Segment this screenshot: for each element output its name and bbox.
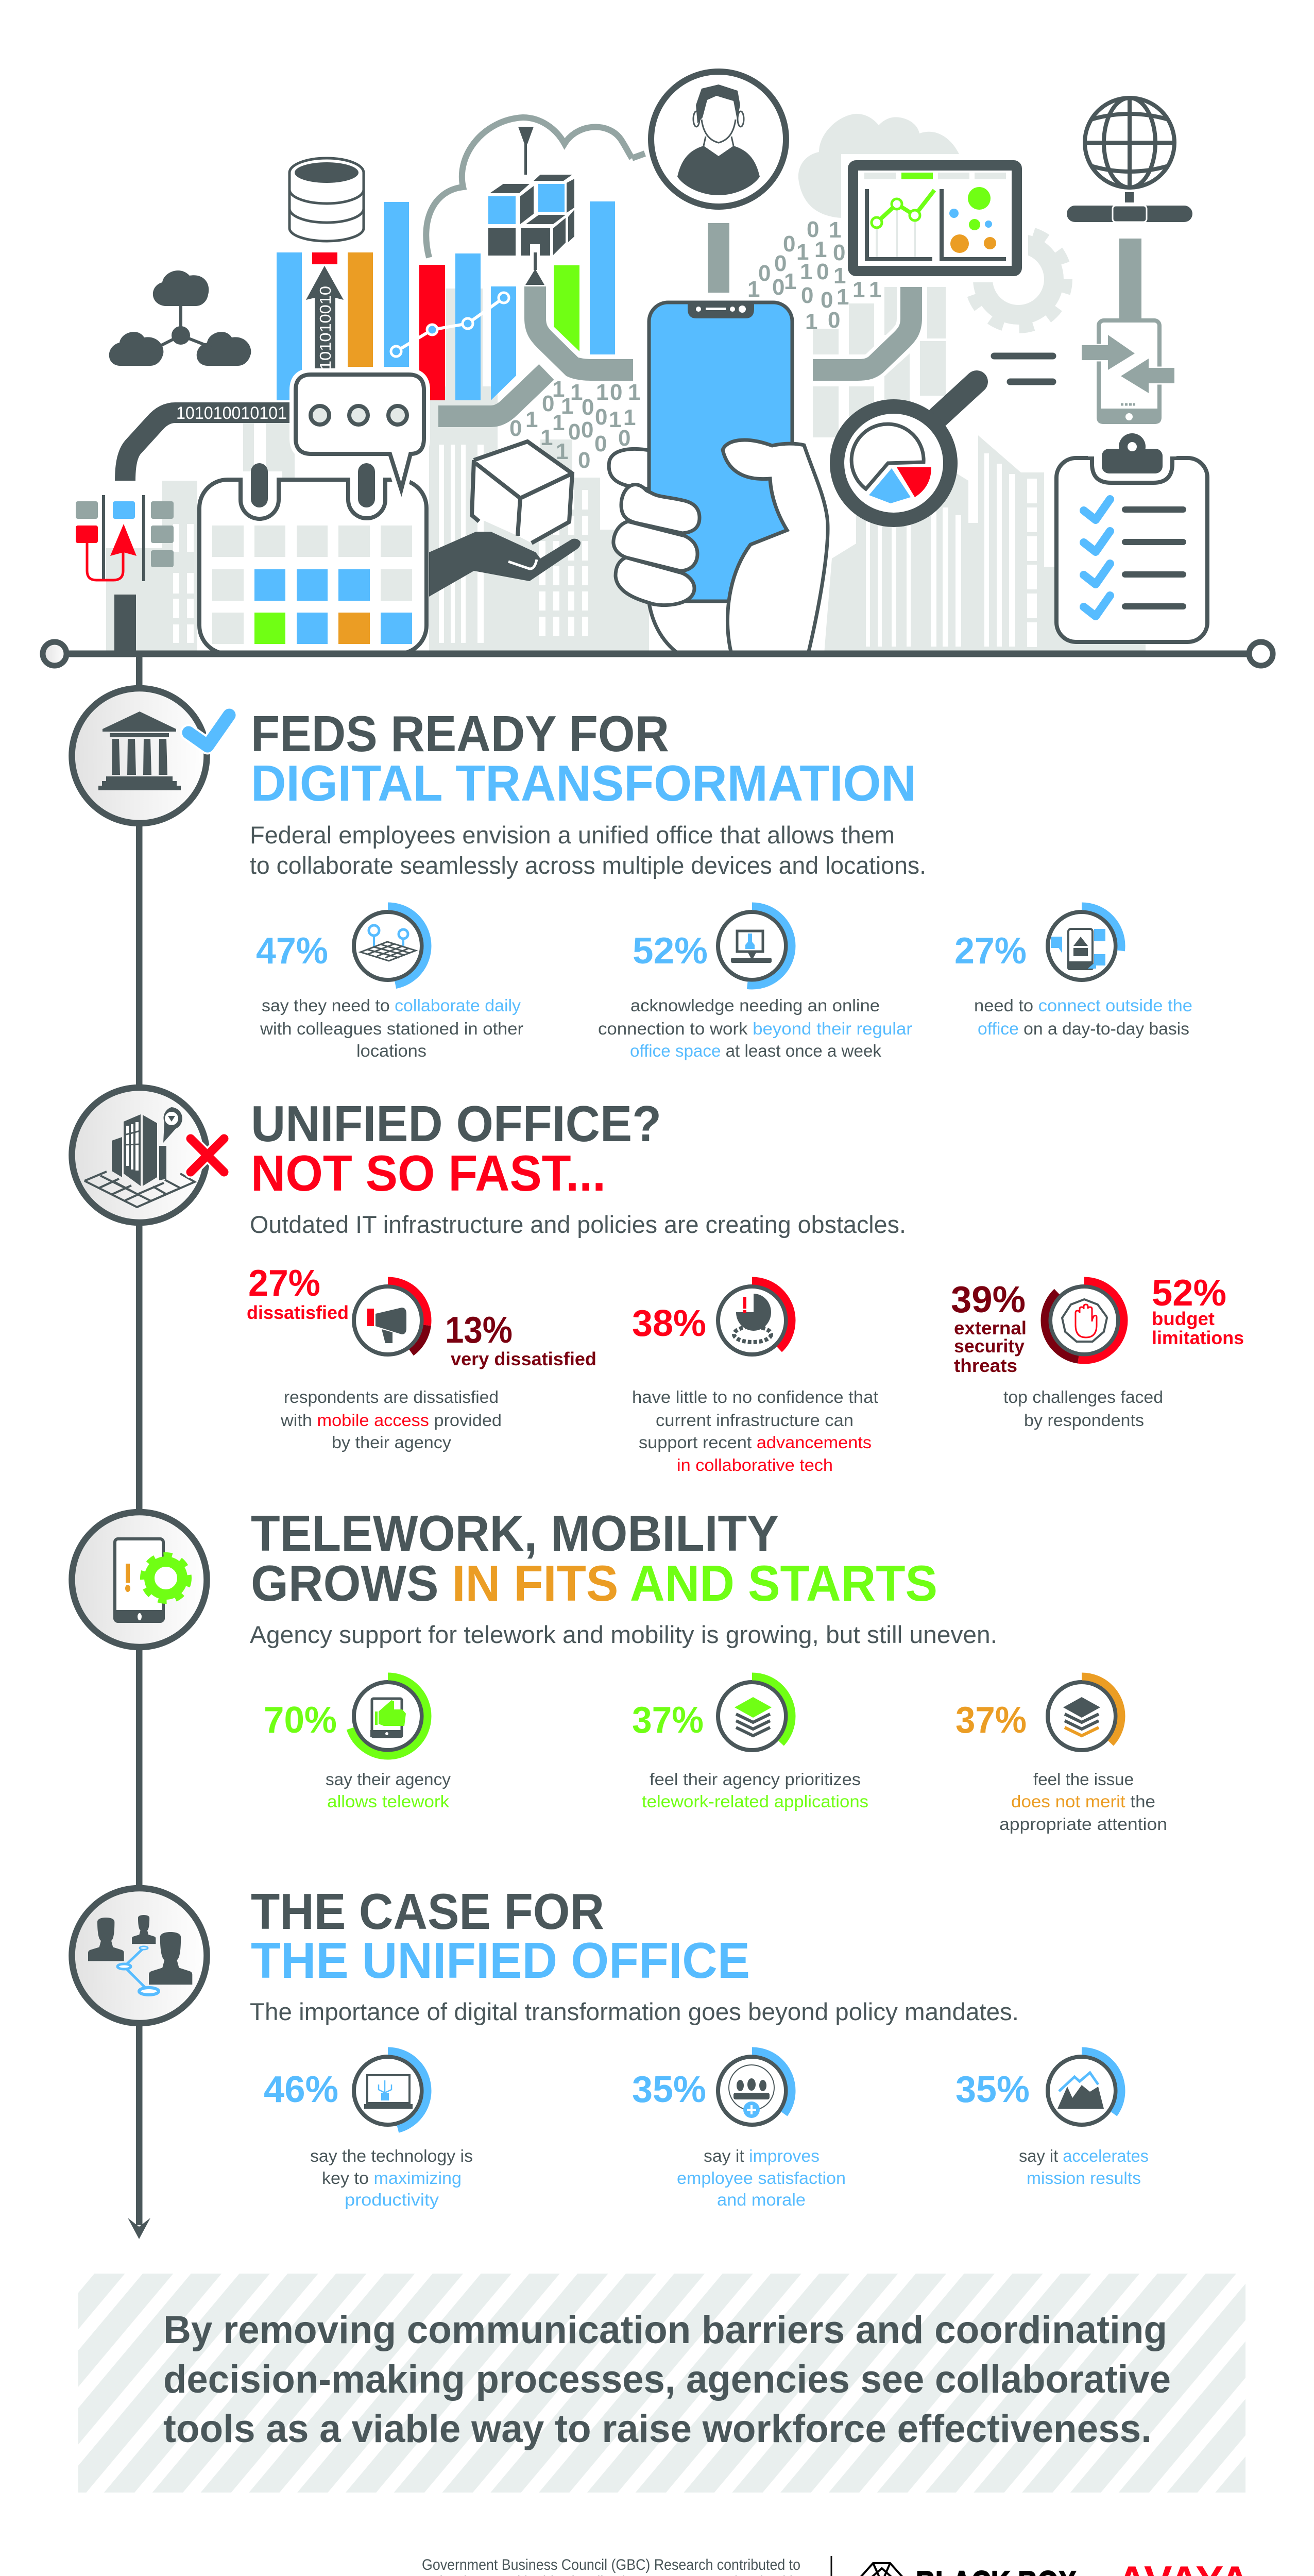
arrow up with binary: 101010010 [316, 286, 334, 370]
stat: 70%: 70% [264, 1700, 337, 1741]
heading [251, 1505, 937, 1612]
stat: 37% does not merit: does not merit the [1011, 1792, 1155, 1811]
icon: tablet with thumbs up [370, 1699, 406, 1737]
calendar [199, 463, 426, 654]
stat: 27% [954, 906, 1192, 1038]
stat: 52%: acknowledge needing an online [630, 996, 880, 1015]
stat: 70%: say their agency [326, 1770, 451, 1789]
heading [251, 1883, 750, 1989]
stat: 35% satisfaction: and morale [717, 2190, 806, 2209]
stat: 38%: 38% [632, 1303, 706, 1344]
icon: desktop computer with user [731, 931, 772, 963]
stat: top challenges: security [954, 1335, 1025, 1357]
stat: 35% mission: say it accelerates [1019, 2146, 1149, 2165]
stat: top challenges: limitations [1152, 1327, 1244, 1348]
icon: cloud network [109, 270, 251, 366]
icon: orange layers [1063, 1697, 1100, 1736]
line chart over bars [391, 293, 509, 357]
heading: UNIFIED OFFICE? [251, 1095, 661, 1152]
stat: 35% mission [955, 2051, 1149, 2188]
icon: office towers with grid [72, 1088, 224, 1223]
stat: top challenges: external [954, 1317, 1027, 1338]
timeline base line [43, 642, 1273, 666]
stat: mobile access dissatisfaction: 27% [248, 1263, 320, 1304]
stat: 37% does not merit: 37% [955, 1700, 1027, 1741]
icon: analytics tablet [845, 157, 1025, 279]
intro text: Outdated IT infrastructure and policies are creating obstacles. [250, 1211, 906, 1238]
stat: top challenges: by respondents [1024, 1411, 1144, 1430]
stat: 70%: allows telework [327, 1792, 450, 1811]
icon: pie with alert [734, 1294, 771, 1342]
panel: not so fast [72, 1088, 1244, 1475]
stat: 35% satisfaction: 35% [632, 2069, 706, 2110]
icon: smartphone [649, 302, 792, 601]
heading: NOT SO FAST... [251, 1145, 606, 1201]
stat: 37% prioritizes: feel their agency prioritizes [650, 1770, 861, 1789]
stat: 47%: locations [356, 1041, 426, 1060]
icon: megaphone [367, 1308, 406, 1343]
stat: top challenges: budget [1152, 1308, 1215, 1329]
stat: 38%: have little to no confidence that [632, 1387, 878, 1406]
stat: 47%: 47% [256, 930, 328, 972]
stat: 47%: with colleagues stationed in other [260, 1019, 523, 1038]
stat: 46%: key to maximizing [322, 2168, 462, 2188]
intro text: Agency support for telework and mobility is growing, but still uneven. [250, 1621, 997, 1648]
icon: antenna [518, 127, 534, 175]
stat: 38%: in collaborative tech [677, 1455, 833, 1475]
dashes [994, 356, 1053, 382]
icon: mobile data exchange [1082, 239, 1174, 424]
intro text: The importance of digital transformation goes beyond policy mandates. [250, 1998, 1019, 2025]
hero illustration [76, 72, 1207, 654]
icon: user avatar [651, 72, 786, 293]
icon: mountain with trend line [1057, 2073, 1104, 2109]
stat: 47% [256, 906, 523, 1060]
panel: the case for the unified office [72, 1883, 1149, 2209]
icon: connected people [72, 1888, 207, 2023]
stat: 27%: need to connect outside the [974, 996, 1192, 1015]
stat: mobile access dissatisfaction: respondents are dissatisfied [284, 1387, 499, 1406]
heading: THE CASE FOR [251, 1883, 604, 1940]
stat: mobile access dissatisfaction: dissatisfied [247, 1302, 349, 1323]
background city skyline [106, 114, 1146, 654]
stat: 37% prioritizes [632, 1676, 868, 1811]
stat: top challenges: 39% [951, 1279, 1026, 1320]
stat: 46%: productivity [345, 2190, 439, 2209]
stat: 27%: 27% [954, 930, 1027, 972]
arrow into cubes [525, 252, 544, 285]
icon: clipboard checklist [1056, 433, 1207, 642]
icon: modular cubes [488, 175, 574, 256]
timeline vertical arrow [128, 654, 150, 2239]
heading: THE UNIFIED OFFICE [251, 1932, 750, 1989]
stat: mobile access dissatisfaction [247, 1263, 596, 1452]
stat: 46% [264, 2051, 473, 2209]
stat: 46%: 46% [264, 2069, 338, 2110]
stat: 38% [632, 1281, 878, 1475]
flow diagram with red arrow [76, 495, 174, 654]
stat: 27%: office on a day-to-day basis [978, 1019, 1189, 1038]
stat: 52%: office space at least once a week [630, 1041, 881, 1060]
stat: top challenges: top challenges faced [1003, 1387, 1163, 1406]
icon: database [289, 158, 364, 241]
gray data pipes [438, 286, 911, 416]
heading [251, 705, 916, 811]
stat: 35% satisfaction: say it improves [704, 2146, 820, 2165]
stat: 35% mission: 35% [955, 2069, 1030, 2110]
arrow up with binary [306, 266, 344, 374]
icon: hand holding phone [613, 440, 828, 654]
footer divider [830, 2556, 832, 2576]
stat: 37% does not merit: appropriate attention [999, 1815, 1167, 1834]
stat: 70% [264, 1676, 451, 1811]
icon: stop hand [1062, 1299, 1107, 1342]
stat: 52%: 52% [633, 930, 708, 972]
logo: Black Box [856, 2563, 1077, 2576]
heading [251, 1095, 661, 1201]
cloud outline [426, 117, 645, 258]
stat: 46%: say the technology is [310, 2146, 473, 2165]
intro text [250, 821, 926, 879]
icon: green layers [735, 1697, 772, 1736]
stat: 38%: support recent advancements [639, 1433, 872, 1452]
stat: 35% satisfaction [632, 2051, 846, 2209]
stat: 35% satisfaction: employee satisfaction [677, 2168, 846, 2188]
stat: 38%: current infrastructure can [656, 1411, 854, 1430]
icon: magnifier with pie [830, 382, 977, 527]
stat: 37% does not merit: feel the issue [1033, 1770, 1134, 1789]
icon: laptop [364, 2075, 413, 2109]
icon: phone with chat bubbles [1051, 929, 1105, 970]
icon: location pins on map [361, 925, 416, 961]
stat: 37% prioritizes: 37% [632, 1700, 704, 1741]
icon: hand holding box [429, 442, 581, 597]
icon: globe [1075, 98, 1184, 222]
stat: 37% does not merit [955, 1676, 1167, 1834]
icon: first finger behind phone [609, 449, 652, 489]
dark pipe with binary [125, 403, 294, 481]
stat: 47%: say they need to collaborate daily [262, 996, 521, 1015]
stat: top challenges: 52% [1152, 1273, 1226, 1314]
icon: federal building [72, 688, 229, 823]
gear [953, 222, 1067, 328]
panel: conclusion callout: tools as a viable way to raise workforce effectiveness. [163, 2407, 1152, 2451]
dark pipe with binary: 101010010101 [176, 403, 287, 423]
stat: top challenges: threats [954, 1355, 1017, 1376]
panel: feds ready [72, 688, 1192, 1060]
speech bubble [296, 375, 424, 489]
bar chart [277, 201, 615, 400]
icon: phone with gear [72, 1512, 207, 1647]
intro text: to collaborate seamlessly across multiple devices and locations. [250, 852, 926, 879]
footer credit text: Government Business Council (GBC) Research contributed to [422, 2556, 800, 2573]
stat: 35% mission: mission results [1027, 2168, 1141, 2188]
heading: GROWS IN FITS AND STARTS [251, 1555, 937, 1612]
stat: top challenges [951, 1273, 1244, 1430]
heading: FEDS READY FOR [251, 705, 669, 762]
stat: mobile access dissatisfaction: 13% [445, 1310, 513, 1351]
binary digits right: 010110001011010011110 [747, 217, 881, 334]
heading: DIGITAL TRANSFORMATION [251, 755, 916, 811]
binary digits: 111010100110110010010 [509, 377, 640, 473]
stat: 37% prioritizes: telework-related applications [642, 1792, 868, 1811]
stat: mobile access dissatisfaction: by their agency [332, 1433, 452, 1452]
icon: team with plus [729, 2065, 774, 2118]
intro text: Federal employees envision a unified office that allows them [250, 821, 895, 849]
panel: conclusion callout: By removing communication barriers and coordinating [163, 2308, 1167, 2352]
stat: mobile access dissatisfaction: very dissatisfied [451, 1348, 596, 1369]
heading: TELEWORK, MOBILITY [251, 1505, 779, 1562]
panel: conclusion callout [78, 2274, 1245, 2493]
stat: 52%: connection to work beyond their regular [598, 1019, 912, 1038]
stat: mobile access dissatisfaction: with mobile access provided [280, 1411, 502, 1430]
stat: 52% [598, 906, 912, 1060]
panel: conclusion callout: decision-making processes, agencies see collaborative [163, 2358, 1171, 2401]
panel: telework [72, 1505, 1167, 1834]
